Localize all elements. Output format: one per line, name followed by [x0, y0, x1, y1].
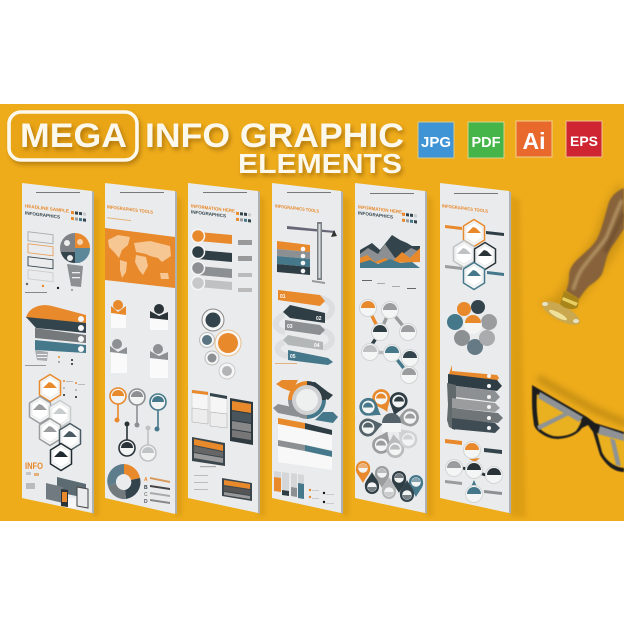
donut legend	[144, 477, 170, 505]
crane	[287, 222, 337, 284]
heading: INFORMATION HERE	[191, 203, 235, 214]
panel 5: information here infographics	[355, 183, 427, 514]
INFO label: INFO	[25, 461, 43, 472]
area chart	[360, 235, 420, 289]
heading: INFORMATION HERE	[358, 204, 402, 215]
heading: INFOGRAPHICS TOOLS	[275, 203, 319, 214]
circle diagram	[200, 309, 241, 379]
icon: puzzle lightbulb	[60, 233, 90, 287]
donut legend: A	[144, 477, 148, 483]
outlined text boxes	[28, 232, 53, 282]
panel 2: infographics tools	[105, 183, 177, 514]
MEGA outlined badge	[9, 112, 137, 160]
data table	[278, 418, 332, 470]
panel 1: headline sample infographics	[22, 183, 94, 514]
small device	[194, 475, 252, 501]
heading: INFOGRAPHICS	[25, 210, 60, 220]
donut chart	[107, 464, 141, 499]
panel shadows	[92, 195, 526, 518]
numbered ribbons: 04	[314, 343, 320, 349]
badge: EPS	[566, 121, 602, 157]
envelope cards	[110, 300, 168, 378]
teardrop row	[356, 461, 423, 502]
numbered ribbons: 03	[287, 324, 293, 330]
badge: JPG: JPG	[421, 134, 451, 151]
connected pin diagram	[110, 388, 166, 461]
node network	[368, 308, 409, 375]
circular arrow diagram	[273, 380, 338, 423]
orange world map block	[105, 228, 175, 288]
legend dots	[25, 283, 73, 293]
heading line two: ELEMENTS	[238, 148, 402, 179]
connected circles	[445, 439, 502, 502]
icon: black glasses	[532, 378, 624, 472]
numbered ribbons: 01	[280, 294, 286, 300]
yellow background band	[0, 104, 624, 521]
panel 4: infographics tools with crane	[272, 183, 343, 514]
tablet	[230, 398, 253, 445]
numbered ribbons	[275, 290, 333, 365]
donut legend: B	[144, 485, 148, 491]
petal wheel	[447, 300, 497, 355]
heading: HEADLINE SAMPLE	[25, 203, 69, 214]
hexagon group with labels	[445, 220, 504, 290]
badge: PDF	[468, 122, 504, 158]
globe rows	[192, 230, 252, 292]
MEGA outlined badge: MEGA	[20, 117, 127, 155]
stacked bars	[277, 241, 310, 275]
device mockups	[26, 472, 88, 508]
donut legend: D	[144, 499, 148, 505]
badge: EPS: EPS	[570, 133, 598, 149]
heading: INFOGRAPHICS TOOLS	[442, 203, 488, 214]
heading: INFOGRAPHICS TOOLS	[107, 204, 153, 215]
heading line one: INFO GRAPHIC	[145, 117, 404, 155]
heading: INFOGRAPHICS	[191, 209, 226, 219]
heading	[107, 204, 153, 224]
panel 3: information here infographics	[188, 183, 260, 514]
heading: INFOGRAPHICS	[358, 210, 393, 220]
donut legend: C	[144, 492, 148, 498]
arrow stack	[447, 365, 503, 433]
icon: wax seal stamp	[539, 182, 624, 329]
badge: PDF: PDF	[472, 135, 501, 151]
numbered ribbons: 02	[316, 316, 322, 322]
hexagon cluster	[30, 374, 80, 470]
heading	[191, 203, 251, 223]
laptop screen	[192, 437, 225, 467]
panel 6: infographics tools	[440, 183, 511, 514]
petal flower	[356, 386, 421, 459]
large bulb with bars	[25, 305, 86, 366]
badge: JPG	[418, 122, 454, 158]
numbered ribbons: 05	[290, 354, 296, 360]
bar chart	[274, 471, 334, 504]
title: MEGA INFO GRAPHIC ELEMENTS	[9, 112, 404, 179]
comparison table	[192, 390, 227, 428]
heading	[25, 203, 86, 286]
badge: Ai	[516, 121, 552, 157]
list dots	[63, 380, 85, 398]
file format badges	[418, 121, 602, 158]
heading	[358, 204, 417, 223]
badge: Ai: Ai	[522, 128, 546, 154]
